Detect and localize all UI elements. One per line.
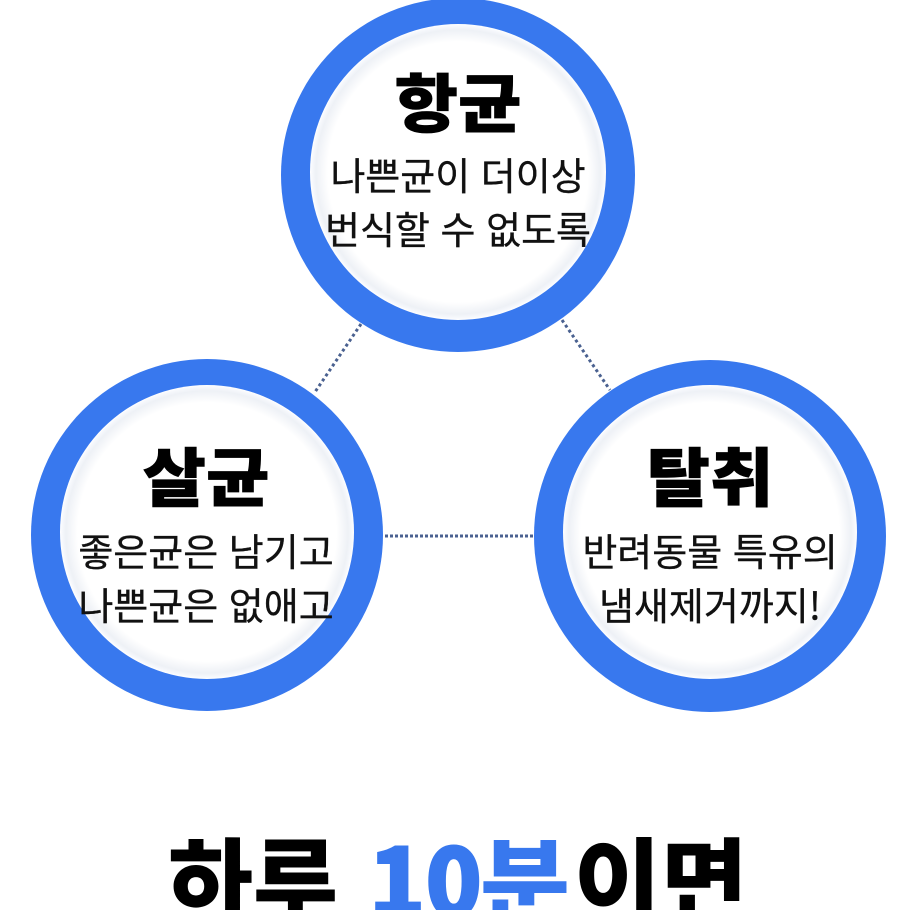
text: description line 1: 반려동물 특유의 xyxy=(582,522,838,577)
panel: right circle xyxy=(534,360,886,712)
heading: 살균: 살균 xyxy=(143,428,269,520)
panel: top circle xyxy=(281,0,635,352)
text: description line 1: 좋은균은 남기고 xyxy=(78,522,334,577)
dotted connector: top to right xyxy=(562,320,610,390)
dotted connector: top to left xyxy=(315,324,361,392)
text: description line 2: 나쁜균은 없애고 xyxy=(78,576,334,631)
heading: 탈취: 탈취 xyxy=(647,428,773,520)
panel: left circle xyxy=(31,359,383,711)
heading: 항균: 항균 xyxy=(395,54,521,146)
text: description line 1: 나쁜균이 더이상 xyxy=(330,146,586,201)
dotted connector: left to right xyxy=(385,534,535,538)
text: description line 2: 냄새제거까지! xyxy=(599,576,821,631)
title: 하루 10분이면 xyxy=(168,808,748,910)
text: description line 2: 번식할 수 없도록 xyxy=(325,200,591,255)
